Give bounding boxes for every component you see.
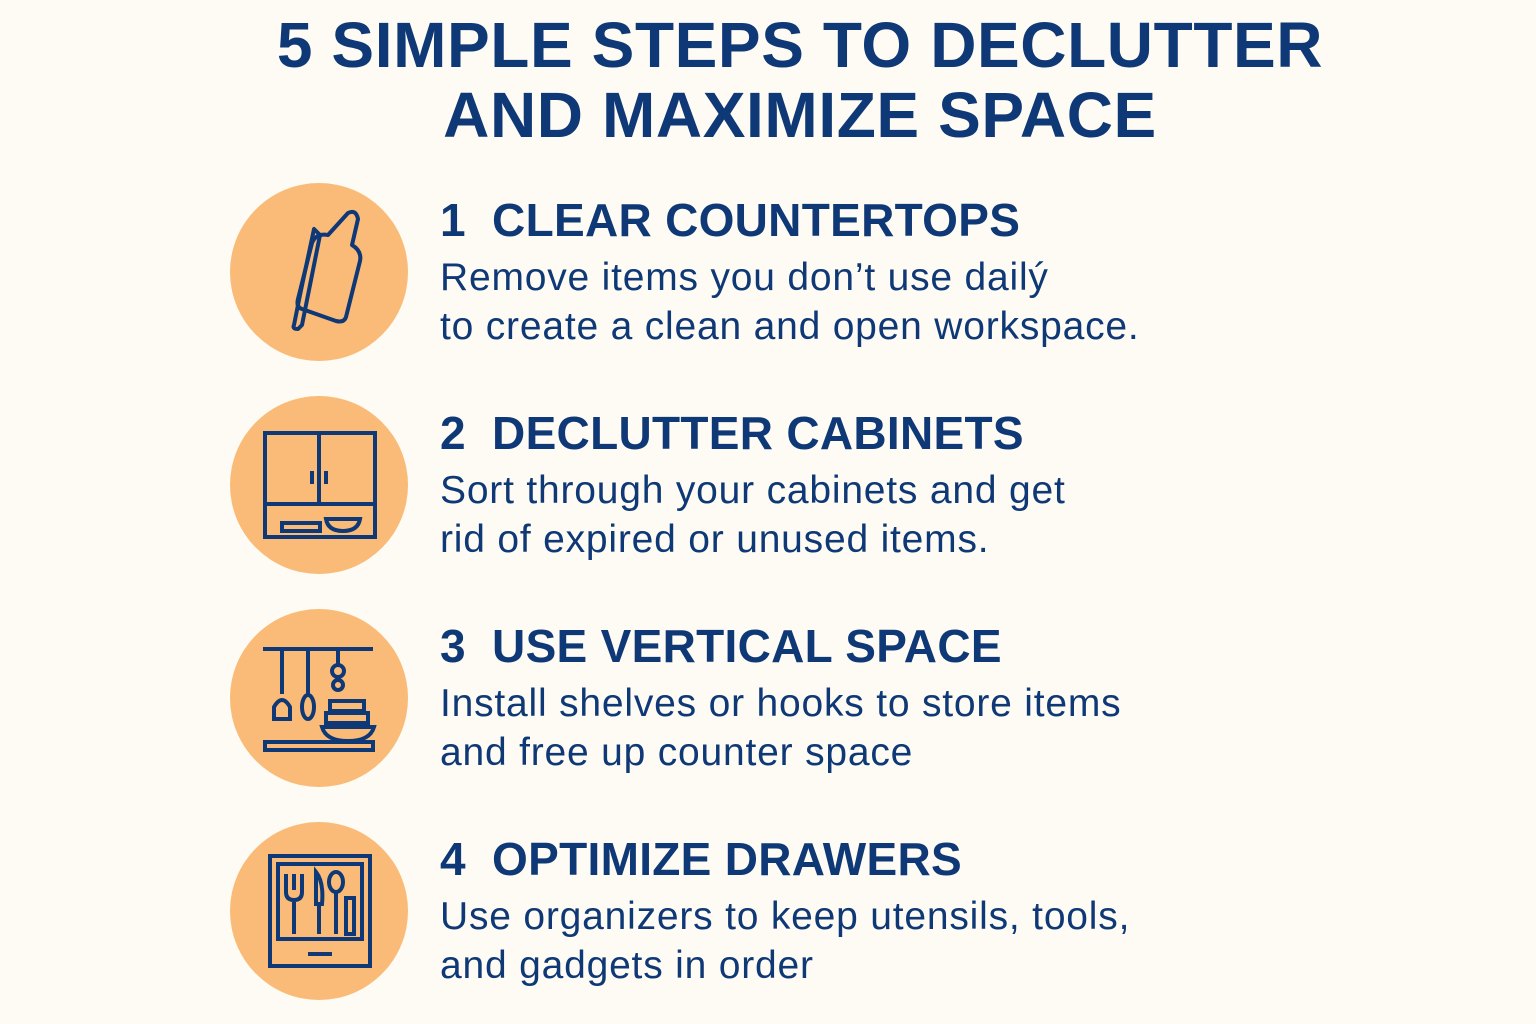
title: AND MAXIMIZE SPACE [443,79,1157,151]
title: 5 SIMPLE STEPS TO DECLUTTER [277,9,1323,81]
heading: 1 CLEAR COUNTERTOPS [440,194,1020,246]
text: Install shelves or hooks to store items [440,682,1121,725]
text: and gadgets in order [440,944,814,987]
heading: 4 OPTIMIZE DRAWERS [440,833,962,885]
title [277,9,1323,151]
panel: step 3 [230,609,1121,787]
heading: 3 USE VERTICAL SPACE [440,620,1002,672]
text [440,895,1130,987]
text [440,682,1121,774]
panel: step 1 [230,183,1140,361]
text: and free up counter space [440,731,913,774]
heading: 2 DECLUTTER CABINETS [440,407,1024,459]
icon: cutting board and knife [230,183,408,361]
icon: drawer organizer [230,822,408,1000]
text [440,256,1140,348]
text: to create a clean and open workspace. [440,305,1140,348]
icon: cabinets [230,396,408,574]
panel: step 4 [230,822,1130,1000]
text: Use organizers to keep utensils, tools, [440,895,1130,938]
text: rid of expired or unused items. [440,518,989,561]
icon: hooks and shelf [230,609,408,787]
text: Remove items you don’t use dailý [440,256,1049,299]
text [440,469,1066,561]
text: Sort through your cabinets and get [440,469,1066,512]
panel: step 2 [230,396,1066,574]
